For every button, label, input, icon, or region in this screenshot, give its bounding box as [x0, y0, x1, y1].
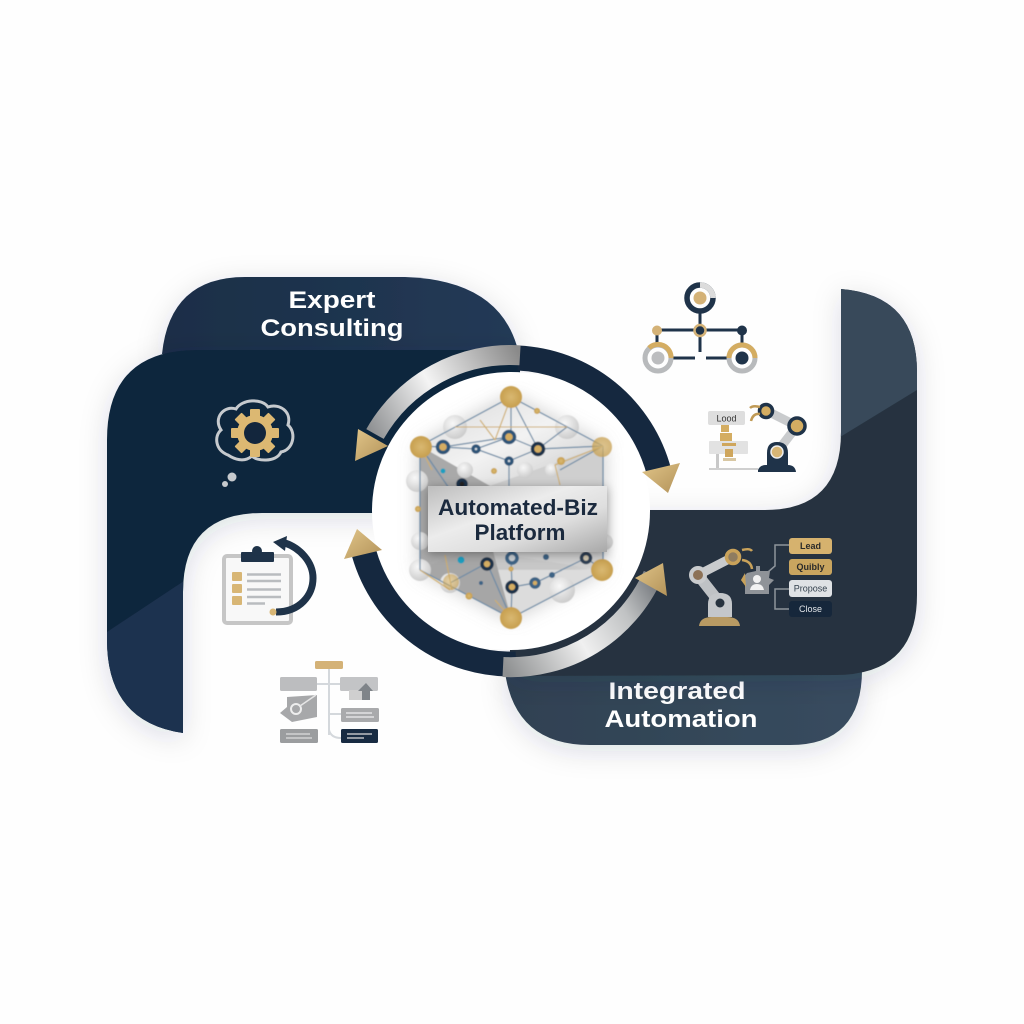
large gold nodes: [410, 386, 613, 629]
arc: top left silver: [375, 355, 520, 434]
arc: bottom left navy ring segment: [364, 553, 516, 664]
pipeline label: lead: Lead: [800, 541, 821, 551]
network gold links: [420, 397, 603, 618]
arrow: top right gold: [642, 463, 680, 493]
blue ring nodes: [438, 432, 590, 592]
icon: thought bubble gear: [217, 401, 293, 487]
icon: robot arm with load station: Lood: [716, 414, 737, 424]
pipeline label: qualify: Quibly: [796, 562, 825, 572]
panel: integrated automation tab: [505, 670, 862, 745]
heading: expert consulting: Consulting: [260, 315, 404, 342]
teal nodes: [440, 468, 555, 585]
arc: top right navy ring segment: [518, 358, 659, 472]
gear: [231, 409, 279, 457]
pipeline label: lead: [789, 538, 832, 554]
pipeline label: propose: Propose: [794, 584, 827, 594]
pipeline label: close: Close: [799, 604, 822, 614]
arc: bottom right silver: [503, 575, 653, 667]
platform hexagon network: [406, 386, 613, 629]
central white circle: [372, 372, 650, 650]
panel: left navy shape: [107, 350, 520, 760]
heading: integrated automation: Automation: [604, 706, 758, 733]
icon: clipboard with loop arrow: [224, 536, 313, 623]
icon: flowchart: [280, 661, 379, 743]
panel: right slate shape: [510, 280, 917, 676]
arrow: bottom right gold: [635, 563, 667, 596]
panel: expert consulting tab: [162, 277, 518, 354]
icon: robot arm with sales pipeline: [691, 538, 832, 626]
network links: [420, 397, 603, 618]
icon: org network: [645, 285, 755, 371]
heading: integrated automation: Integrated: [608, 678, 746, 705]
platform label text: Automated-Biz: [438, 495, 598, 520]
platform label plate: [428, 486, 607, 552]
pipeline label: close: [789, 601, 832, 617]
pipeline label: qualify: [789, 559, 832, 575]
platform label text: Platform: [474, 520, 566, 545]
arrow: top left gold: [355, 429, 388, 461]
pipeline label: propose: [789, 580, 832, 597]
arrow: bottom left gold: [344, 529, 382, 559]
heading: expert consulting: Expert: [288, 287, 376, 314]
network spheres: [406, 415, 613, 603]
icon: robot arm with load station: [708, 404, 805, 472]
